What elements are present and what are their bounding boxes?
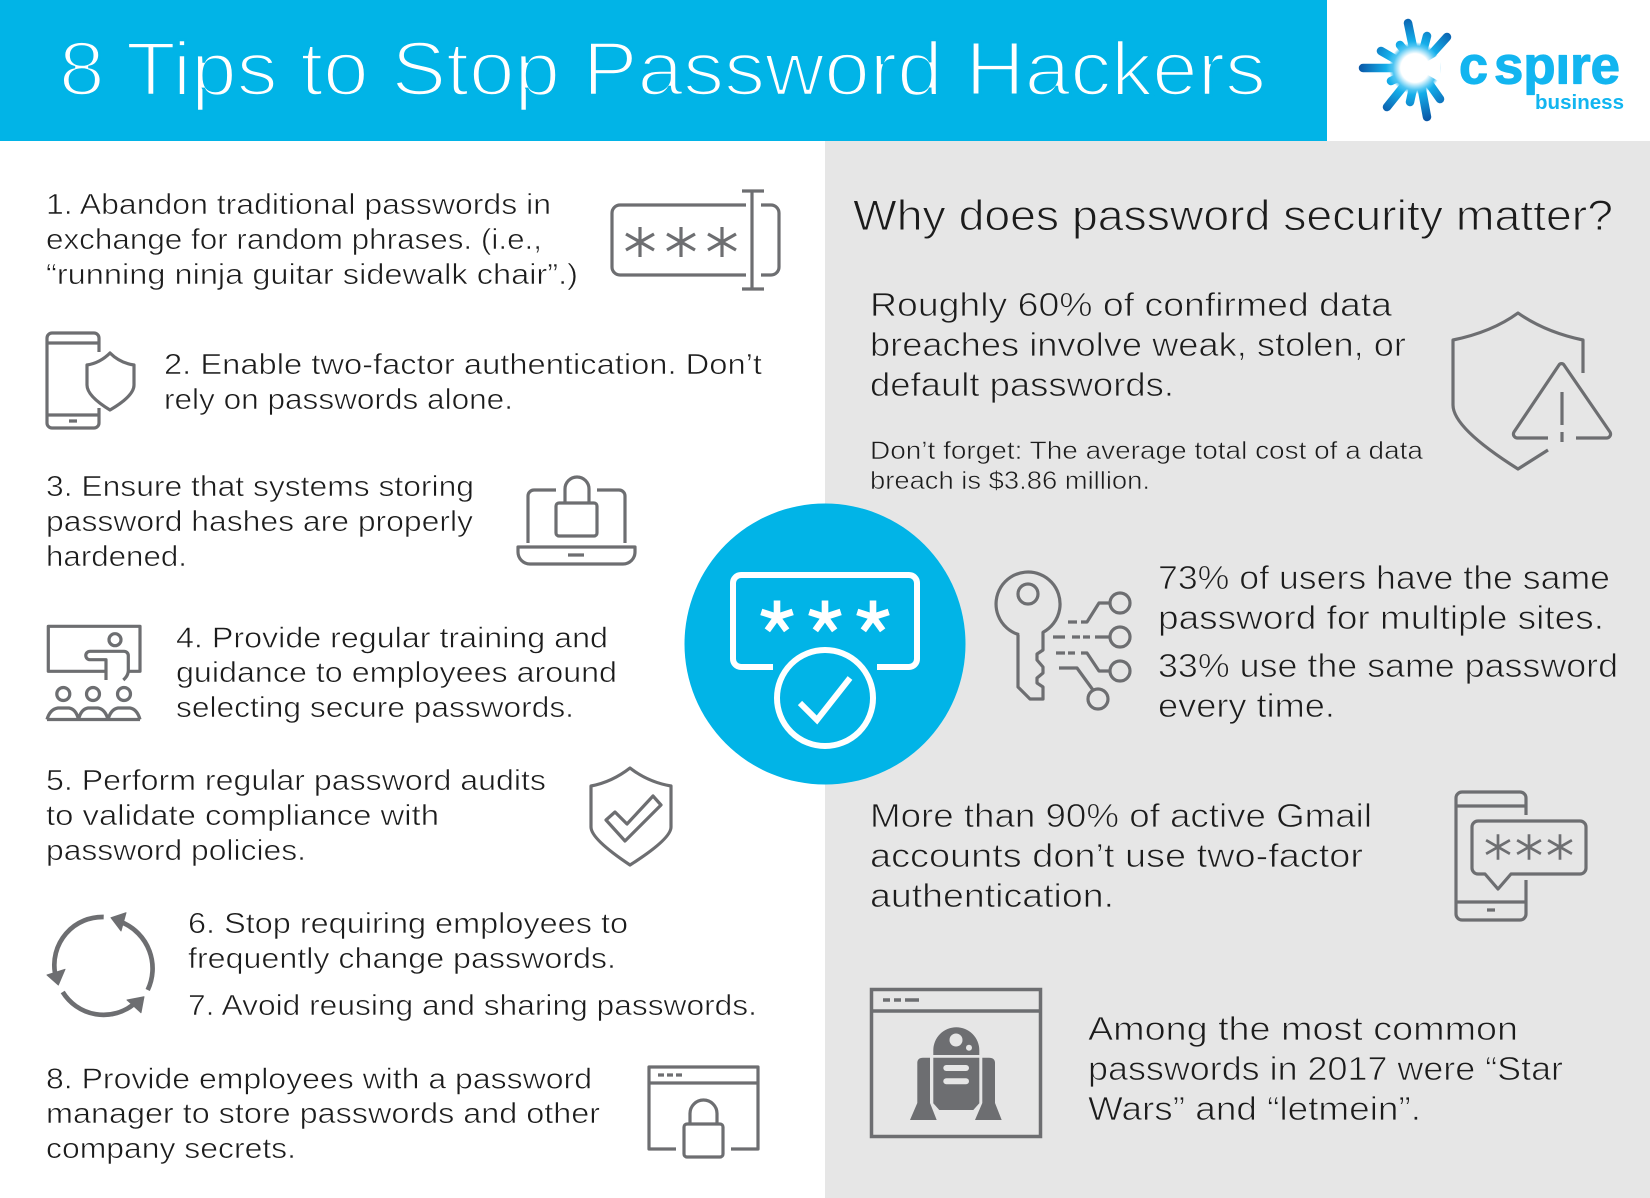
tip 3 text: password hashes are properly [46, 506, 474, 538]
stat: common passwords [1088, 1011, 1563, 1128]
icon: browser window with R2-D2 [871, 990, 1041, 1136]
tip 4 text [176, 622, 617, 724]
stat: common passwords: Among the most common [1088, 1011, 1518, 1048]
tip 8 text: 8. Provide employees with a password [46, 1064, 592, 1096]
icon: password field with cursor [612, 191, 779, 289]
header banner [0, 0, 1327, 141]
stat: 60 percent of breaches [870, 287, 1406, 404]
panel: right gray background [825, 141, 1650, 1198]
tip 8 text: manager to store passwords and other [46, 1098, 601, 1130]
stat: Gmail two-factor: authentication. [870, 878, 1114, 915]
note: average cost of breach: breach is $3.86 million. [870, 467, 1150, 495]
tip 3 text: 3. Ensure that systems storing [46, 471, 474, 503]
tip 6 and 7 text [188, 908, 757, 1022]
stat: Gmail two-factor: accounts don’t use two-factor [870, 838, 1363, 875]
tip 4 text: selecting secure passwords. [176, 692, 574, 724]
tip 3 text [46, 471, 474, 573]
icon: shield with warning triangle [1453, 313, 1611, 469]
stat: common passwords: passwords in 2017 were “Star [1088, 1051, 1563, 1088]
stat: reused passwords [1158, 560, 1618, 725]
tip 1 text: exchange for random phrases. (i.e., [46, 224, 542, 256]
tip 4 text: guidance to employees around [176, 657, 617, 689]
tip 3 text: hardened. [46, 541, 187, 573]
heading: why password security matters: Why does password security matter? [853, 192, 1613, 240]
icon: browser window with padlock [649, 1067, 758, 1157]
icon: laptop with padlock [518, 477, 635, 564]
tip 5 text: to validate compliance with [46, 800, 439, 832]
logo: C Spire Business: business [1535, 91, 1624, 114]
icon: classroom training [47, 626, 140, 720]
tip 4 text: 4. Provide regular training and [176, 622, 608, 654]
icon: phone with password speech bubble [1456, 792, 1586, 920]
tip 2 text: 2. Enable two-factor authentication. Don’t [164, 349, 762, 381]
tip 2 text [164, 349, 762, 416]
stat: reused passwords: 73% of users have the same [1158, 560, 1610, 597]
title: 8 Tips to Stop Password Hackers [59, 27, 1266, 112]
tip 8 text [46, 1064, 601, 1165]
icon: phone with shield [47, 333, 134, 428]
stat: common passwords: Wars” and “letmein”. [1088, 1091, 1421, 1128]
tip 8 text: company secrets. [46, 1133, 296, 1165]
tip 5 text [46, 765, 546, 867]
icon: shield with check [591, 768, 671, 865]
central badge: password check [684, 504, 966, 784]
stat: Gmail two-factor: More than 90% of active Gmail [870, 798, 1372, 835]
tip 1 text: “running ninja guitar sidewalk chair”.) [46, 259, 578, 291]
note: average cost of breach: Don’t forget: The average total cost of a data [870, 437, 1423, 465]
stat: 60 percent of breaches: default passwords. [870, 367, 1174, 404]
stat: Gmail two-factor [870, 798, 1372, 915]
stat: reused passwords: 33% use the same password [1158, 648, 1618, 685]
stat: reused passwords: password for multiple sites. [1158, 600, 1604, 637]
tip 1 text: 1. Abandon traditional passwords in [46, 189, 551, 221]
note: average cost of breach [870, 437, 1423, 495]
tip 1 text [46, 189, 578, 291]
icon: key with circuit nodes [996, 572, 1130, 709]
logo: C Spire Business: c [1459, 36, 1488, 96]
stat: 60 percent of breaches: breaches involve weak, stolen, or [870, 327, 1406, 364]
tip 2 text: rely on passwords alone. [164, 384, 513, 416]
stat: 60 percent of breaches: Roughly 60% of confirmed data [870, 287, 1392, 324]
stat: reused passwords: every time. [1158, 688, 1335, 725]
logo: C Spire Business [1363, 23, 1625, 117]
icon: cycle arrows [47, 913, 153, 1015]
tip 5 text: password policies. [46, 835, 306, 867]
tip 6 and 7 text: 6. Stop requiring employees to [188, 908, 628, 940]
tip 6 and 7 text: frequently change passwords. [188, 943, 616, 975]
tip 6 and 7 text: 7. Avoid reusing and sharing passwords. [188, 990, 757, 1022]
tip 5 text: 5. Perform regular password audits [46, 765, 546, 797]
logo: C Spire Business: spire [1494, 36, 1620, 96]
